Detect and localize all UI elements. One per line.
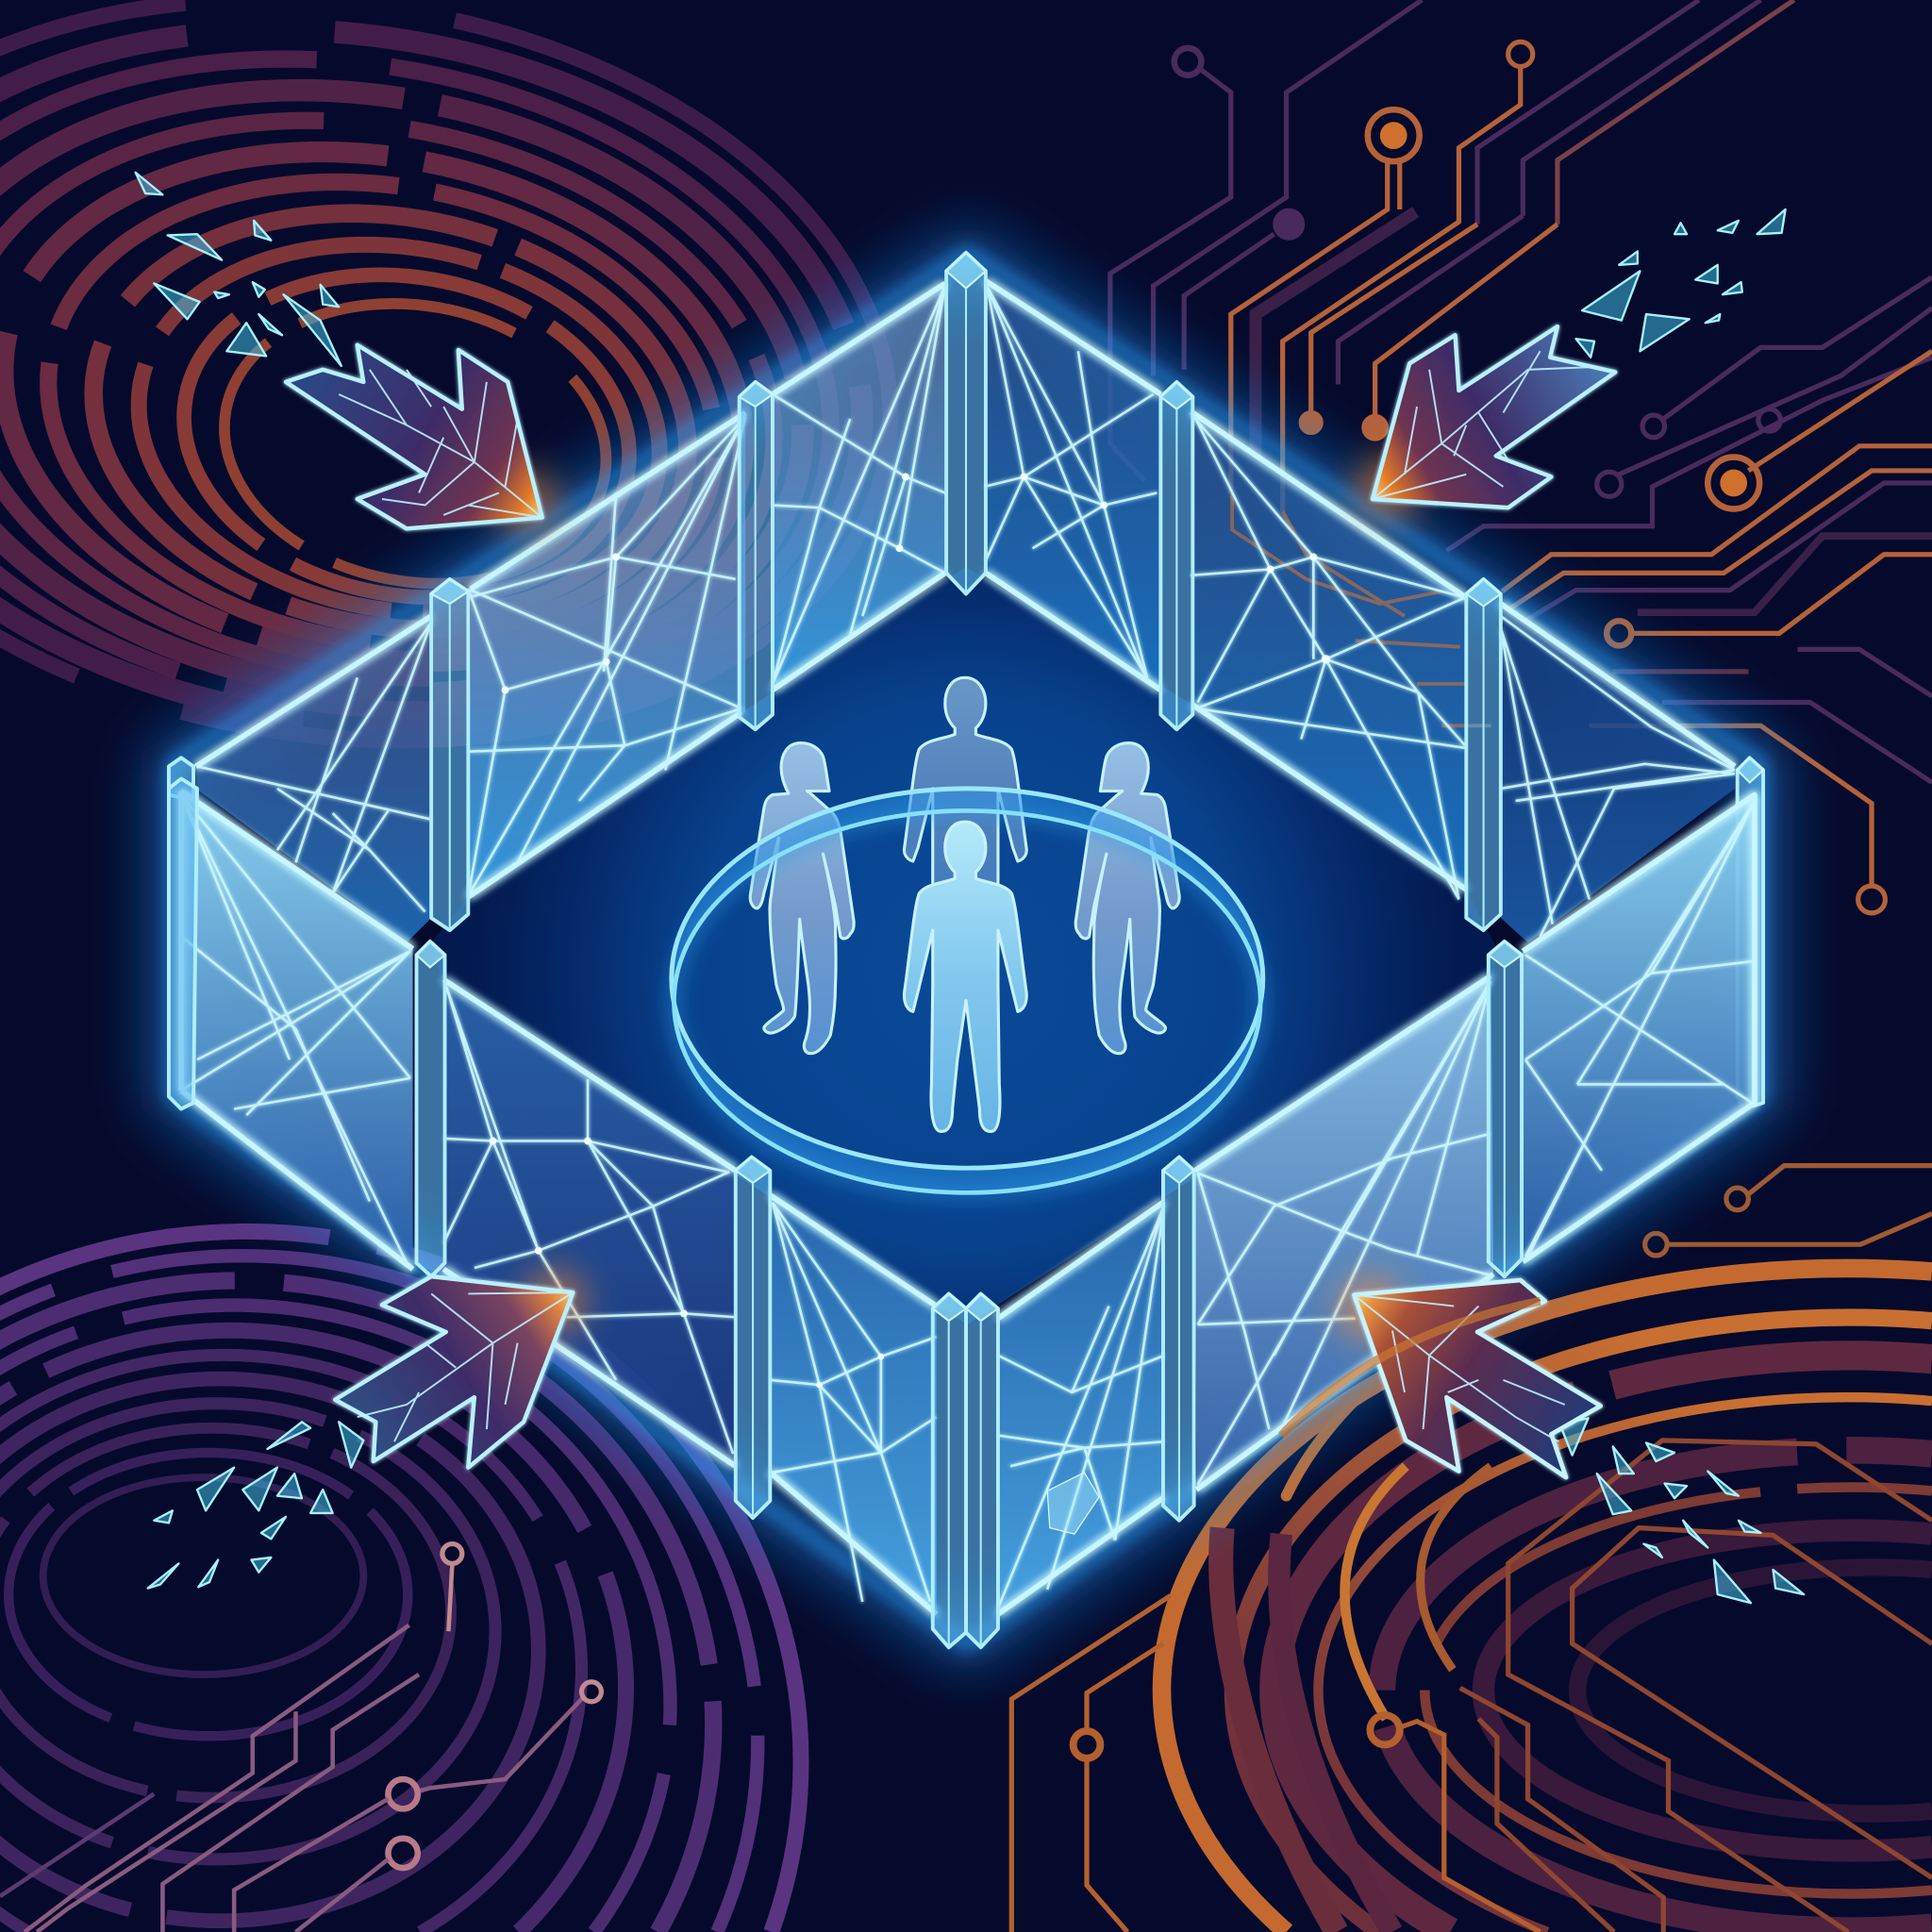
post: front lower left <box>736 1157 770 1518</box>
inner floor of the enclosure <box>431 567 1497 1324</box>
post: back right upper <box>1160 382 1192 729</box>
post: back right <box>1466 579 1501 930</box>
arrow: top left, shattering against wall <box>286 345 559 535</box>
circuit traces: bottom right <box>1011 1441 1932 1932</box>
back wall panels <box>196 281 1735 942</box>
arrow: bottom right, shattering against wall <box>1281 1276 1601 1477</box>
protected group on circular platform <box>672 677 1263 1192</box>
post: front left <box>416 941 445 1276</box>
front person <box>904 822 1026 1131</box>
post: front lower right <box>1163 1157 1194 1521</box>
panel: back right middle <box>1191 413 1491 899</box>
post: back left upper <box>740 382 773 729</box>
arrow: top right, shattering against wall <box>1356 326 1615 520</box>
shards: top right <box>1576 209 1786 358</box>
swirl: bottom left vortex <box>0 1231 801 1932</box>
post: front centre left <box>933 1293 966 1647</box>
left person <box>750 743 854 1054</box>
panel: front right corner <box>1523 794 1755 1261</box>
shards: top left <box>136 173 341 366</box>
platform ring <box>672 789 1263 1192</box>
outer wall glow <box>173 253 1762 1645</box>
post: left front corner <box>169 778 197 1109</box>
front wall posts <box>169 778 1522 1647</box>
shards: bottom right <box>1560 1418 1804 1603</box>
swirl: bottom right vortex <box>1162 1268 1932 1932</box>
panel: back right inner <box>985 281 1160 690</box>
post: front centre right <box>966 1293 998 1647</box>
panel: back right outer <box>1501 604 1735 942</box>
panel: front centre left <box>770 1195 937 1614</box>
circuit traces: right side below the wall <box>1645 1166 1932 1256</box>
panel: front left middle <box>443 979 736 1466</box>
back wall posts <box>169 253 1763 1109</box>
circuit traces: bottom left <box>0 1544 601 1932</box>
panel: front left corner <box>181 791 413 1269</box>
shards: bottom left <box>148 1422 363 1589</box>
panel: back left middle <box>468 413 745 897</box>
arrow: bottom left, shattering against wall <box>335 1269 587 1468</box>
back person <box>904 677 1026 912</box>
panel: front right middle <box>1195 975 1493 1490</box>
circuit traces: top right <box>1110 0 1932 913</box>
post: far left <box>169 758 193 801</box>
panel: front centre right <box>998 1201 1164 1614</box>
right person <box>1075 743 1179 1054</box>
swirl: top left vortex <box>0 0 939 810</box>
panel: back left inner <box>773 283 945 690</box>
post: back left <box>431 579 468 930</box>
panel: back left outer <box>196 616 431 942</box>
post: front right <box>1489 941 1522 1276</box>
post: far right <box>1738 758 1763 1109</box>
front wall panels <box>181 791 1755 1614</box>
post: back centre <box>946 253 986 594</box>
